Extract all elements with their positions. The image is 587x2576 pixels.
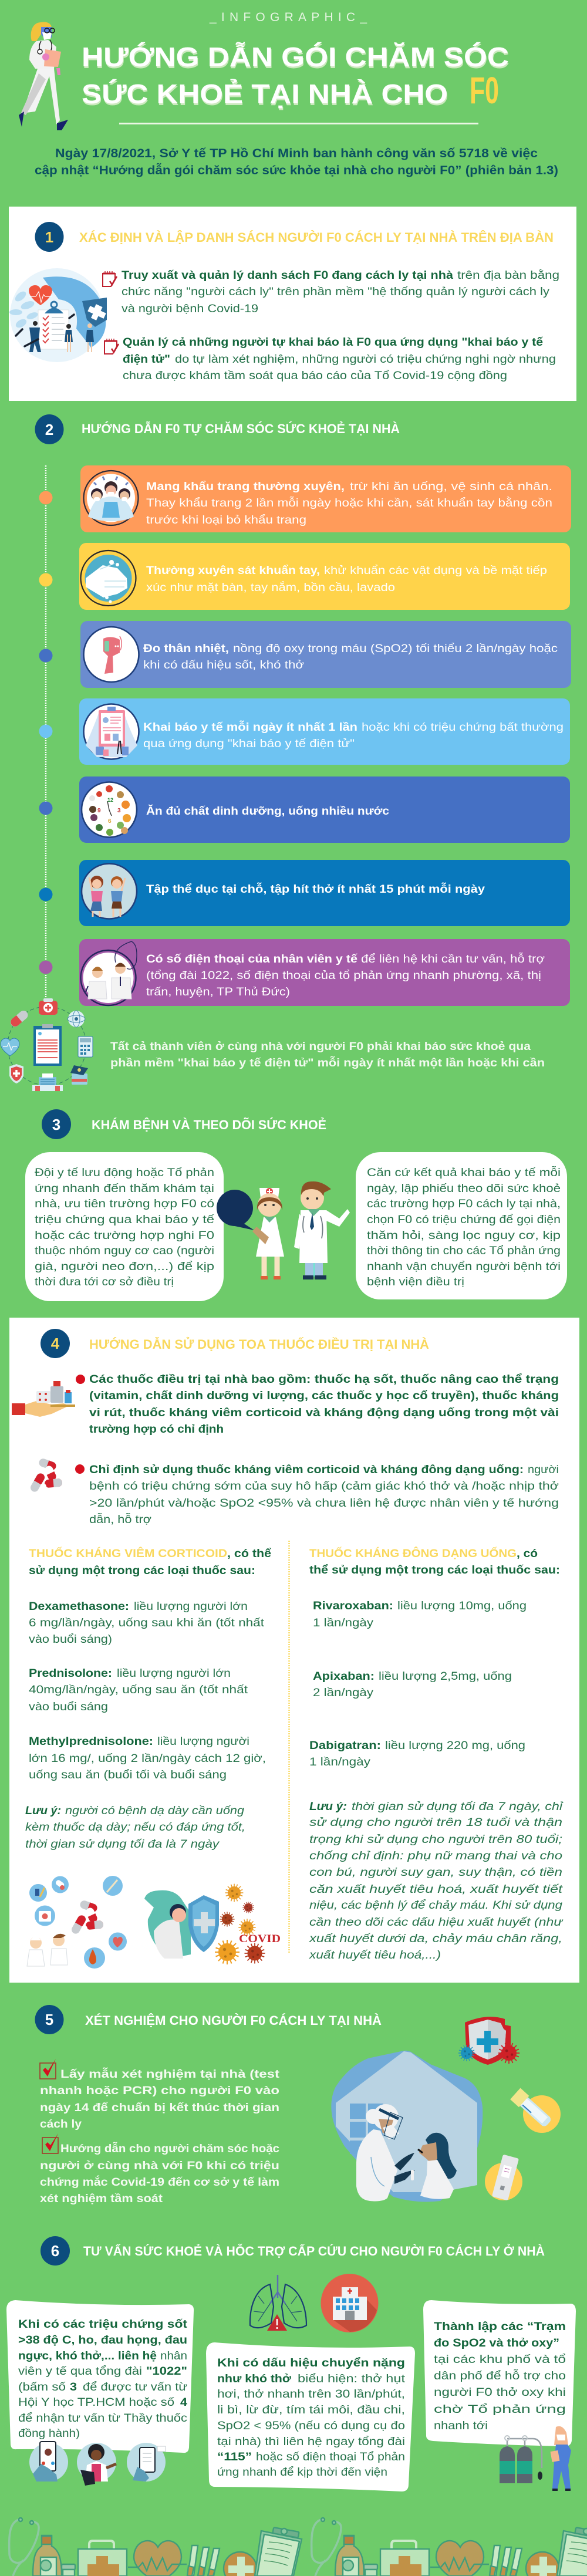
note: thời gian sử dụng tối đa là 7 ngày (25, 1838, 220, 1851)
note: thời gian sử dụng tối đa 7 ngày, chỉ (352, 1800, 564, 1813)
heading 5: XÉT NGHIỆM CHO NGƯỜI F0 CÁCH LY TẠI NHÀ (85, 2013, 382, 2028)
box: symptom contact: viên y tế qua tổng đài (18, 2365, 142, 2378)
drug: Dexamethasone: 6 mg/lần/ngày, uống sau khi ăn (tốt nhất (29, 1616, 265, 1629)
timeline (39, 465, 53, 998)
column heading (309, 1546, 560, 1576)
card text: hoặc khi có triệu chứng bất thường (362, 721, 564, 734)
note: Lưu ý: (309, 1800, 347, 1813)
box: severe symptoms: hoặc số điện thoại Tổ phản (256, 2450, 405, 2463)
indication text (89, 1463, 559, 1526)
box: symptom contact: "1022" (146, 2365, 187, 2378)
icon: medical record (83, 704, 139, 759)
box: oxygen stations: đo SpO2 và thở oxy” (434, 2337, 559, 2349)
icon: thermometer (83, 627, 139, 682)
icon: money (70, 1065, 88, 1085)
box: severe symptoms: ứng nhanh để kịp thời đến viện (217, 2466, 387, 2479)
bubble: health monitoring (356, 1152, 567, 1299)
box: oxygen stations (423, 2300, 576, 2446)
test text 1: cách ly (40, 2118, 82, 2131)
card text: trừ khi ăn uống, vệ sinh cá nhân. (350, 480, 552, 493)
card text: Thường xuyên sát khuẩn tay, (146, 564, 320, 577)
drug: Rivaroxaban (313, 1599, 527, 1629)
box: severe symptoms: tại nhà) thì liên hệ ngay tổng đài (217, 2435, 405, 2448)
note: household members declaration: phần mềm "khai báo y tế điện tử" mỗi ngày ít nhất một lần hoặc khi cần (110, 1055, 545, 1069)
bubble: mobile medical team: thuộc nhóm nguy cơ cao (người (35, 1244, 214, 1257)
card text (146, 564, 547, 594)
drug: Apixaban (313, 1670, 512, 1699)
bullet (76, 1375, 85, 1384)
drug: Prednisolone: 40mg/lần/ngày, uống sau ăn (tốt nhất (29, 1683, 248, 1696)
title accent F0: F0 (470, 69, 499, 112)
note (25, 1804, 245, 1851)
section 2 header (35, 414, 400, 444)
drug: Apixaban: 2 lần/ngày (313, 1686, 373, 1699)
icon: pills (9, 1009, 30, 1028)
header: infographic label: _INFOGRAPHIC_ (209, 11, 367, 24)
icon ring: medical items (1, 998, 93, 1091)
icon: food clock (82, 782, 137, 837)
icon: red check 1 (40, 2059, 56, 2079)
drug: Methylprednisolone: Methylprednisolone: (29, 1735, 153, 1748)
column: anticoagulant (309, 1546, 564, 1961)
number badge 4: 4 (51, 1335, 60, 1352)
test text 2: chứng mắc Covid-19 đến cơ sở y tế làm (40, 2175, 279, 2189)
card: medical phone contact (79, 939, 570, 1006)
number badge 4 (41, 1329, 70, 1358)
note: chống chỉ định: phụ nữ mang thai và cho (309, 1849, 562, 1862)
drug: Rivaroxaban: liều lượng 10mg, uống (397, 1599, 527, 1612)
card text: Có số điện thoại của nhân viên y tế (146, 953, 357, 965)
card text: khử khuẩn các vật dụng và bề mặt tiếp (324, 564, 547, 577)
icons: phone consultation (29, 2442, 166, 2486)
bubble: mobile medical team: ứng nhanh đến thăm khám tại (35, 1182, 214, 1195)
drug: Dabigatran: 1 lần/ngày (309, 1755, 370, 1768)
box: oxygen stations: Thành lập các “Trạm (434, 2320, 566, 2333)
bubble: mobile medical team (25, 1152, 224, 1301)
box: severe symptoms: biểu hiện: thở hụt (298, 2372, 406, 2385)
drug: Prednisolone (29, 1667, 248, 1713)
drug: Apixaban: liều lượng 2,5mg, uống (379, 1670, 512, 1683)
bullet text 1: trên địa bàn bằng (457, 268, 559, 282)
speech bubble (217, 1190, 254, 1230)
test text 1: Lấy mẫu xét nghiệm tại nhà (test (60, 2067, 280, 2081)
card text: Thay khẩu trang 2 lần mỗi ngày hoặc khi cần, sát khuẩn tay bằng cồn (146, 496, 552, 509)
treatment text: (vitamin, chất dinh dưỡng vi lượng, các thuốc y học cổ truyền), thuốc kháng (89, 1389, 559, 1402)
box: symptom contact: >38 độ C, ho, đau họng, đau (18, 2334, 187, 2347)
card text: Mang khẩu trang thường xuyên, (146, 480, 345, 493)
card: nutrition (79, 776, 570, 843)
drug: Methylprednisolone: liều lượng người (157, 1735, 249, 1748)
icon: calendar check 2 (104, 339, 119, 354)
drug: Prednisolone: Prednisolone: (29, 1667, 112, 1680)
box: symptom contact: ngực, khó thở,... liên hệ (18, 2349, 157, 2362)
heading 3: KHÁM BỆNH VÀ THEO DÕI SỨC KHOẺ (92, 1117, 326, 1132)
icon: test tube (510, 2088, 561, 2133)
bubble: health monitoring: Căn cứ kết quả khai báo y tế mỗi (367, 1166, 561, 1179)
box: severe symptoms: li bì, lừ đừ, tím tái môi, đầu chi, (217, 2403, 405, 2416)
drug: Rivaroxaban: 1 lần/ngày (313, 1616, 373, 1629)
icon: calculator (78, 1037, 93, 1057)
test text 2: Hướng dẫn cho người chăm sóc hoặc (60, 2141, 279, 2155)
card: hand sanitising (79, 543, 570, 610)
indication text: bệnh có triệu chứng sớm của suy hô hấp (cảm giác khó thở và /hoặc nhịp thở (89, 1480, 559, 1493)
bullet text 2: Quản lý cả những người tự khai báo là F0 qua ứng dụng "khai báo y tế (123, 336, 543, 349)
bubble: health monitoring: thăm hỏi, sàng lọc nguy cơ, kịp (367, 1229, 561, 1242)
number badge 6: 6 (51, 2242, 59, 2260)
bullet text 1: và người bệnh Covid-19 (122, 302, 258, 315)
note: niệu, các bệnh lý để chảy máu. Khi sử dụng (309, 1899, 562, 1912)
note: sử dụng cho người trên 18 tuổi và thận (309, 1816, 562, 1829)
drug: Rivaroxaban: Rivaroxaban: (313, 1599, 393, 1612)
icon: lungs (250, 2275, 306, 2331)
number badge 2 (35, 414, 63, 444)
panel: section 1 (9, 207, 576, 401)
drug: Dabigatran: Dabigatran: (309, 1739, 381, 1752)
drug: Methylprednisolone: uống sau ăn (buổi tối và buổi sáng (29, 1768, 227, 1781)
icon: hospital (32, 1073, 63, 1091)
box: symptom contact: 3 (70, 2381, 77, 2393)
test text 1: nhanh hoặc PCR) cho người F0 vào (40, 2084, 279, 2097)
note: căn xuất huyết tiêu hoá, xuất huyết tiết (309, 1883, 564, 1896)
note: cần theo dõi các dấu hiệu xuất huyết (như (309, 1916, 564, 1929)
column: corticoid (25, 1546, 271, 1851)
label: COVID: COVID (239, 1933, 281, 1945)
box: symptom contact: 4 (180, 2396, 187, 2409)
card: health declaration (79, 698, 570, 765)
treatment text: Các thuốc điều trị tại nhà bao gồm: thuốc hạ sốt, thuốc nâng cao thể trạng (89, 1373, 559, 1386)
drug: Dexamethasone: Dexamethasone: (29, 1600, 129, 1613)
bubble: health monitoring: chọn F0 có triệu chứng để gọi điện (367, 1213, 561, 1226)
title (82, 42, 509, 109)
test text 1: ngày 14 để chuẩn bị kết thúc thời gian (40, 2101, 279, 2114)
drug: Apixaban: Apixaban: (313, 1670, 375, 1683)
illustration: walking nurse (19, 22, 68, 130)
drug: Dexamethasone: vào buổi sáng) (29, 1633, 112, 1646)
bubble: health monitoring: thời thông tin cho các Tổ phản ứng (367, 1244, 561, 1257)
card: exercise (79, 860, 570, 926)
intro text: cập nhật “Hướng dẫn gói chăm sóc sức khỏe tại nhà cho người F0” (phiên bản 1.3) (35, 163, 558, 177)
bullet (75, 1464, 85, 1474)
drug: Methylprednisolone (29, 1735, 266, 1781)
card text: trấn, huyện, TP Thủ Đức) (146, 985, 290, 998)
illustration: home test (331, 2051, 483, 2202)
heading 2: HƯỚNG DẪN F0 TỰ CHĂM SÓC SỨC KHOẺ TẠI NHÀ (82, 421, 400, 436)
icon: heart (1, 1038, 19, 1056)
icon: food clock: 6 (108, 818, 112, 825)
card text (146, 480, 552, 526)
box: symptom contact: Hội Y học TP.HCM hoặc số (18, 2396, 174, 2409)
box: oxygen stations: nhanh tới (434, 2419, 488, 2432)
test text 1 (40, 2067, 280, 2131)
icon: calendar check 1 (103, 271, 117, 286)
drug: Prednisolone: liều lượng người lớn (117, 1667, 231, 1680)
icon: hospital (321, 2274, 378, 2332)
number badge 2: 2 (45, 421, 53, 438)
box: symptom contact: đồng hành) (18, 2427, 80, 2440)
bubble: health monitoring: bệnh viện điều trị (367, 1275, 464, 1288)
bubble: health monitoring: ngày, lập phiếu theo dõi sức khoẻ (367, 1182, 561, 1195)
panel: section 4 (9, 1318, 579, 1983)
box: symptom contact: để được tư vấn từ (83, 2381, 187, 2393)
title line 1: HƯỚNG DẪN GÓI CHĂM SÓC (82, 42, 509, 72)
bullet text 2 (123, 336, 556, 382)
column heading: THUỐC KHÁNG VIÊM CORTICOID (29, 1546, 227, 1560)
treatment text: vi rút, thuốc kháng viêm corticoid và kháng động dạng uống trong một vài (89, 1406, 559, 1419)
icon: masked doctors (83, 471, 139, 525)
section 3 header (42, 1109, 326, 1139)
icon: atom (68, 1011, 85, 1027)
drug: Methylprednisolone: lớn 16 mg/, uống 2 lần/ngày cách 12 giờ, (29, 1752, 266, 1765)
note: trọng khi sử dụng cho người trên 80 tuổi; (309, 1833, 562, 1846)
bullet text 1: Truy xuất và quản lý danh sách F0 đang cách ly tại nhà (122, 269, 453, 282)
box: severe symptoms: hơi, thở nhanh trên 30 lần/phút, (217, 2388, 405, 2401)
icon: food clock: 9 (97, 808, 101, 814)
column heading: sử dụng một trong các loại thuốc sau: (29, 1564, 255, 1577)
icon: capsules (29, 1457, 63, 1494)
illustration: protection from covid (144, 1884, 281, 1964)
note: kèm thuốc dạ dày; nếu có đáp ứng tốt, (25, 1821, 245, 1834)
card text: trước khi loại bỏ khẩu trang (146, 514, 306, 526)
illustration: health checklist (9, 268, 108, 362)
heading 6: TƯ VẤN SỨC KHOẺ VÀ HỖC TRỢ CẤP CỨU CHO NGƯỜI F0 CÁCH LY Ở NHÀ (83, 2243, 545, 2258)
indication text: Chỉ định sử dụng thuốc kháng viêm corticoid và kháng đông dạng uống: (89, 1463, 524, 1476)
bubble: health monitoring: các trường hợp F0 cách ly tại nhà, (367, 1197, 561, 1210)
test text 2: xét nghiệm tầm soát (40, 2192, 163, 2205)
illustration: medical icons (27, 1876, 127, 1969)
bubble: mobile medical team: nhà, ưu tiên trường hợp F0 có (35, 1197, 214, 1210)
section 6 header (41, 2236, 545, 2266)
drug: Prednisolone: vào buổi sáng (29, 1700, 108, 1713)
icon: shield and viruses (458, 2017, 519, 2065)
bullet text 1: chức năng "người cách ly" trên phần mềm "hệ thống quản lý người cách ly (122, 285, 549, 298)
card text: khi có dấu hiệu sốt, khó thở (143, 659, 304, 671)
card text (146, 952, 545, 998)
drug: Dexamethasone: liều lượng người lớn (134, 1600, 248, 1613)
note: người có bệnh dạ dày cần uống (65, 1804, 244, 1817)
title line 2: SỨC KHOẺ TẠI NHÀ CHO (82, 79, 448, 109)
column heading: , có thể (227, 1547, 271, 1560)
note: Lưu ý: (25, 1804, 61, 1817)
card text: xúc như mặt bàn, tay nắm, bồn cầu, lavado (146, 580, 395, 594)
heading 4: HƯỚNG DẪN SỬ DỤNG TOA THUỐC ĐIỀU TRỊ TẠI NHÀ (89, 1336, 429, 1352)
note: xuất huyết tiêu hoá,...) (309, 1949, 441, 1961)
bullet text 1 (122, 268, 559, 315)
treatment text: trường hợp có chỉ định (89, 1423, 224, 1436)
card text: qua ứng dụng "khai báo y tế điện tử" (143, 737, 355, 750)
section 5 header (35, 2005, 382, 2034)
icon: red check 2 (42, 2133, 58, 2153)
indication text: người (528, 1463, 559, 1476)
card text: Tập thể dục tại chỗ, tập hít thở ít nhất 15 phút mỗi ngày (146, 882, 485, 896)
bubble: mobile medical team: hoặc các trường hợp nghi F0 (35, 1229, 214, 1242)
drug: Dabigatran (309, 1739, 525, 1768)
box: severe symptoms: như khó thở (217, 2372, 291, 2385)
column heading: , có (517, 1547, 538, 1560)
box: oxygen stations: chờ Tổ phản ứng (434, 2403, 566, 2416)
note: xuất huyết dưới da, chảy máu chân răng, (309, 1932, 562, 1945)
bubble: mobile medical team: triệu chứng qua khai báo y tế (35, 1213, 214, 1226)
card text: nồng độ oxy trong máu (SpO2) tối thiểu 2 lần/ngày hoặc (233, 642, 558, 655)
card text: Đo thân nhiệt, (143, 642, 229, 655)
illustration: nurse and doctor (217, 1181, 350, 1279)
bubble: mobile medical team: thời đưa tới cơ sở điều trị (35, 1275, 174, 1288)
box: symptom contact: nhân (160, 2349, 187, 2362)
bullet text 2: do tự làm xét nghiệm, những người có triệu chứng nghi ngờ nhưng (175, 353, 556, 366)
icon: washing hands (81, 551, 136, 606)
illustration: oxygen tanks and nurse (500, 2426, 571, 2491)
box: oxygen stations: người F0 thở oxy khi (434, 2386, 566, 2399)
footer decorative medical items (9, 2518, 587, 2576)
icon: shield (9, 1064, 23, 1083)
bubble: mobile medical team: Đội y tế lưu động hoặc Tổ phản (35, 1166, 214, 1179)
note: con bú, người suy gan, suy thận, có tiền (309, 1866, 562, 1879)
treatment text (89, 1373, 559, 1436)
card text: Ăn đủ chất dinh dưỡng, uống nhiều nước (146, 804, 389, 818)
number badge 5: 5 (45, 2011, 53, 2028)
icon: doctors consulting (81, 941, 137, 1005)
card text: Khai báo y tế mỗi ngày ít nhất 1 lần (143, 720, 357, 734)
bubble: health monitoring: nhanh vận chuyển người bệnh tới (367, 1260, 561, 1273)
box: symptom contact (6, 2300, 194, 2453)
card text: để liên hệ khi cần tư vấn, hỗ trợ (361, 952, 545, 965)
box: severe symptoms: “115” (217, 2450, 252, 2463)
box: oxygen stations: tại các khu phố và tổ (434, 2353, 566, 2366)
note (309, 1800, 564, 1961)
number badge 3: 3 (52, 1116, 60, 1133)
intro text: Ngày 17/8/2021, Sở Y tế TP Hồ Chí Minh ban hành công văn số 5718 về việc (55, 147, 538, 160)
box: symptom contact: Khi có các triệu chứng sốt (18, 2318, 188, 2331)
column heading: thể sử dụng một trong các loại thuốc sau: (309, 1564, 560, 1576)
icon: hand with medicine (12, 1381, 75, 1417)
bubble: mobile medical team: già, người neo đơn,...) để kịp (35, 1260, 214, 1273)
note: household members declaration: Tất cả thành viên ở cùng nhà với người F0 phải khai báo sức khoẻ qua (110, 1040, 531, 1053)
icon: first aid (39, 998, 58, 1015)
number badge 3 (42, 1109, 71, 1139)
card text (143, 720, 564, 750)
column heading (29, 1546, 271, 1577)
card text (143, 642, 558, 671)
box: symptom contact: (bấm số (18, 2381, 66, 2393)
number badge 1: 1 (45, 228, 53, 246)
box: severe symptoms: Khi có dấu hiệu chuyển nặng (217, 2356, 405, 2369)
icon: clipboard (33, 1024, 62, 1066)
heading 1: XÁC ĐỊNH VÀ LẬP DANH SÁCH NGƯỜI F0 CÁCH LY TẠI NHÀ TRÊN ĐỊA BÀN (79, 230, 554, 245)
box: severe symptoms (206, 2342, 415, 2491)
number badge 6 (41, 2236, 70, 2266)
card: masks (80, 465, 571, 532)
drug: Dabigatran: liều lượng 220 mg, uống (385, 1739, 525, 1752)
indication text: >20 lần/phút và/hoặc SpO2 <95% và chưa liên hệ được nhân viên y tế hướng (89, 1497, 559, 1510)
icon: exercising children (82, 864, 137, 919)
box: oxygen stations: dân phố để hỗ trợ cho (434, 2369, 566, 2382)
card text: (tổng đài 1022, số điện thoại của tổ phản ứng nhanh phường, xã, thị (146, 969, 541, 982)
indication text: dẫn, hỗ trợ (89, 1512, 151, 1526)
test text 2: người ở cùng nhà với F0 khi có triệu (40, 2159, 279, 2172)
icon: test kit (485, 2155, 522, 2200)
number badge 1 (35, 222, 63, 252)
note: household members declaration (110, 1040, 545, 1069)
card: temperature (80, 621, 571, 688)
bullet text 2: điện tử" (123, 353, 170, 366)
icon: food clock: 12 (107, 797, 113, 803)
icon: food clock: 3 (117, 808, 121, 814)
box: severe symptoms: SpO2 < 95% (nếu có dụng cụ đo (217, 2419, 405, 2432)
box: symptom contact: để nhận tư vấn từ Thầy thuốc (18, 2412, 187, 2425)
column heading: THUỐC KHÁNG ĐÔNG DẠNG UỐNG (309, 1546, 517, 1560)
test text 2 (40, 2141, 279, 2205)
bullet text 2: chưa được khám tầm soát qua báo cáo của Tổ Covid-19 cộng đồng (123, 369, 507, 382)
drug: Dexamethasone (29, 1600, 265, 1646)
intro text (35, 147, 558, 177)
number badge 5 (35, 2005, 63, 2034)
